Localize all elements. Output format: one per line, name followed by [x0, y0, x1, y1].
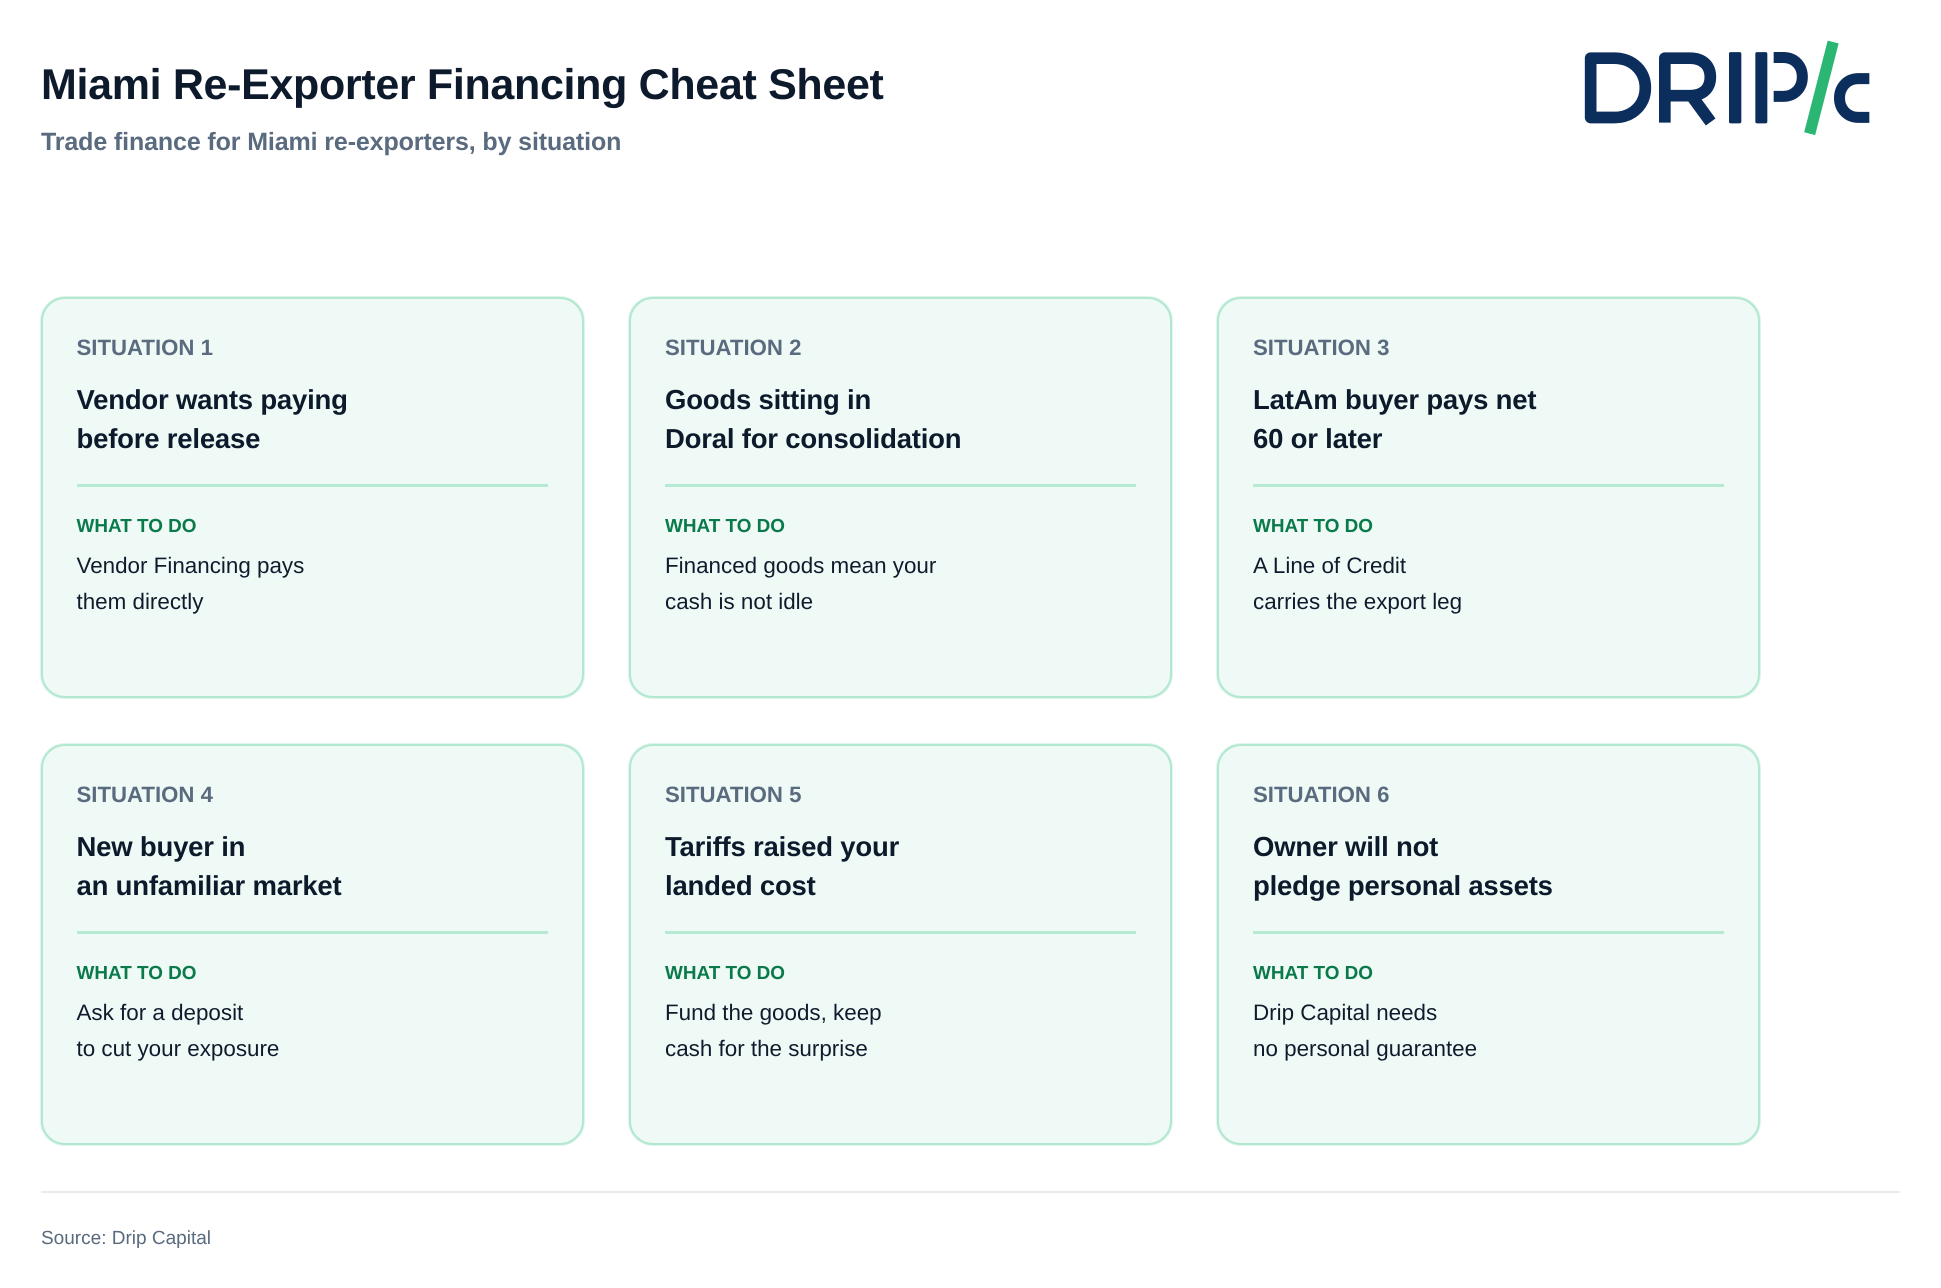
- heading: Vendor wants paying: [76, 384, 348, 415]
- heading: pledge personal assets: [1253, 870, 1553, 901]
- what to do label: WHAT TO DO: [76, 516, 196, 537]
- advice text: Ask for a deposit: [76, 1000, 243, 1025]
- heading: an unfamiliar market: [76, 870, 342, 901]
- advice text: carries the export leg: [1253, 588, 1462, 614]
- heading: New buyer in: [76, 831, 245, 862]
- what to do label: WHAT TO DO: [1253, 963, 1373, 984]
- heading: [1253, 384, 1536, 454]
- subtitle: Trade finance for Miami re-exporters, by situation: [41, 128, 621, 156]
- what to do label: WHAT TO DO: [665, 963, 785, 984]
- advice text: [665, 553, 936, 614]
- advice text: Fund the goods, keep: [665, 1000, 882, 1025]
- heading: 60 or later: [1253, 423, 1382, 454]
- heading: Doral for consolidation: [665, 423, 961, 454]
- title: Miami Re-Exporter Financing Cheat Sheet: [41, 61, 884, 109]
- panel: situation 6: [1217, 744, 1760, 1145]
- advice text: cash for the surprise: [665, 1036, 868, 1060]
- advice text: [665, 1000, 882, 1061]
- panel: situation 1: [41, 297, 584, 698]
- icon: Drip Capital logo: [1584, 40, 1870, 136]
- label: SITUATION 4: [76, 782, 213, 807]
- advice text: them directly: [76, 588, 203, 614]
- label: SITUATION 1: [76, 335, 213, 360]
- advice text: [1253, 553, 1462, 614]
- advice text: to cut your exposure: [76, 1036, 279, 1060]
- advice text: [76, 1000, 279, 1061]
- advice text: Drip Capital needs: [1253, 1000, 1437, 1025]
- heading: [665, 831, 899, 901]
- heading: LatAm buyer pays net: [1253, 384, 1536, 415]
- what to do label: WHAT TO DO: [1253, 516, 1373, 537]
- heading: [1253, 831, 1553, 901]
- advice text: Vendor Financing pays: [76, 553, 304, 578]
- advice text: no personal guarantee: [1253, 1036, 1477, 1060]
- advice text: Financed goods mean your: [665, 553, 936, 578]
- panel: situation 2: [629, 297, 1172, 698]
- heading: Goods sitting in: [665, 384, 871, 415]
- heading: before release: [76, 423, 260, 454]
- label: SITUATION 3: [1253, 335, 1389, 360]
- heading: Tariffs raised your: [665, 831, 899, 862]
- heading: [76, 831, 342, 901]
- heading: Owner will not: [1253, 831, 1438, 862]
- advice text: [76, 553, 304, 614]
- heading: [76, 384, 348, 454]
- panel: situation 4: [41, 744, 584, 1145]
- heading: landed cost: [665, 870, 816, 901]
- panel: situation 5: [629, 744, 1172, 1145]
- label: SITUATION 2: [665, 335, 801, 360]
- heading: [665, 384, 961, 454]
- advice text: A Line of Credit: [1253, 553, 1406, 578]
- advice text: cash is not idle: [665, 588, 813, 614]
- panel: situation 3: [1217, 297, 1760, 698]
- what to do label: WHAT TO DO: [76, 963, 196, 984]
- label: SITUATION 5: [665, 782, 801, 807]
- label: SITUATION 6: [1253, 782, 1389, 807]
- source note: Source: Drip Capital: [41, 1228, 211, 1248]
- advice text: [1253, 1000, 1477, 1061]
- what to do label: WHAT TO DO: [665, 516, 785, 537]
